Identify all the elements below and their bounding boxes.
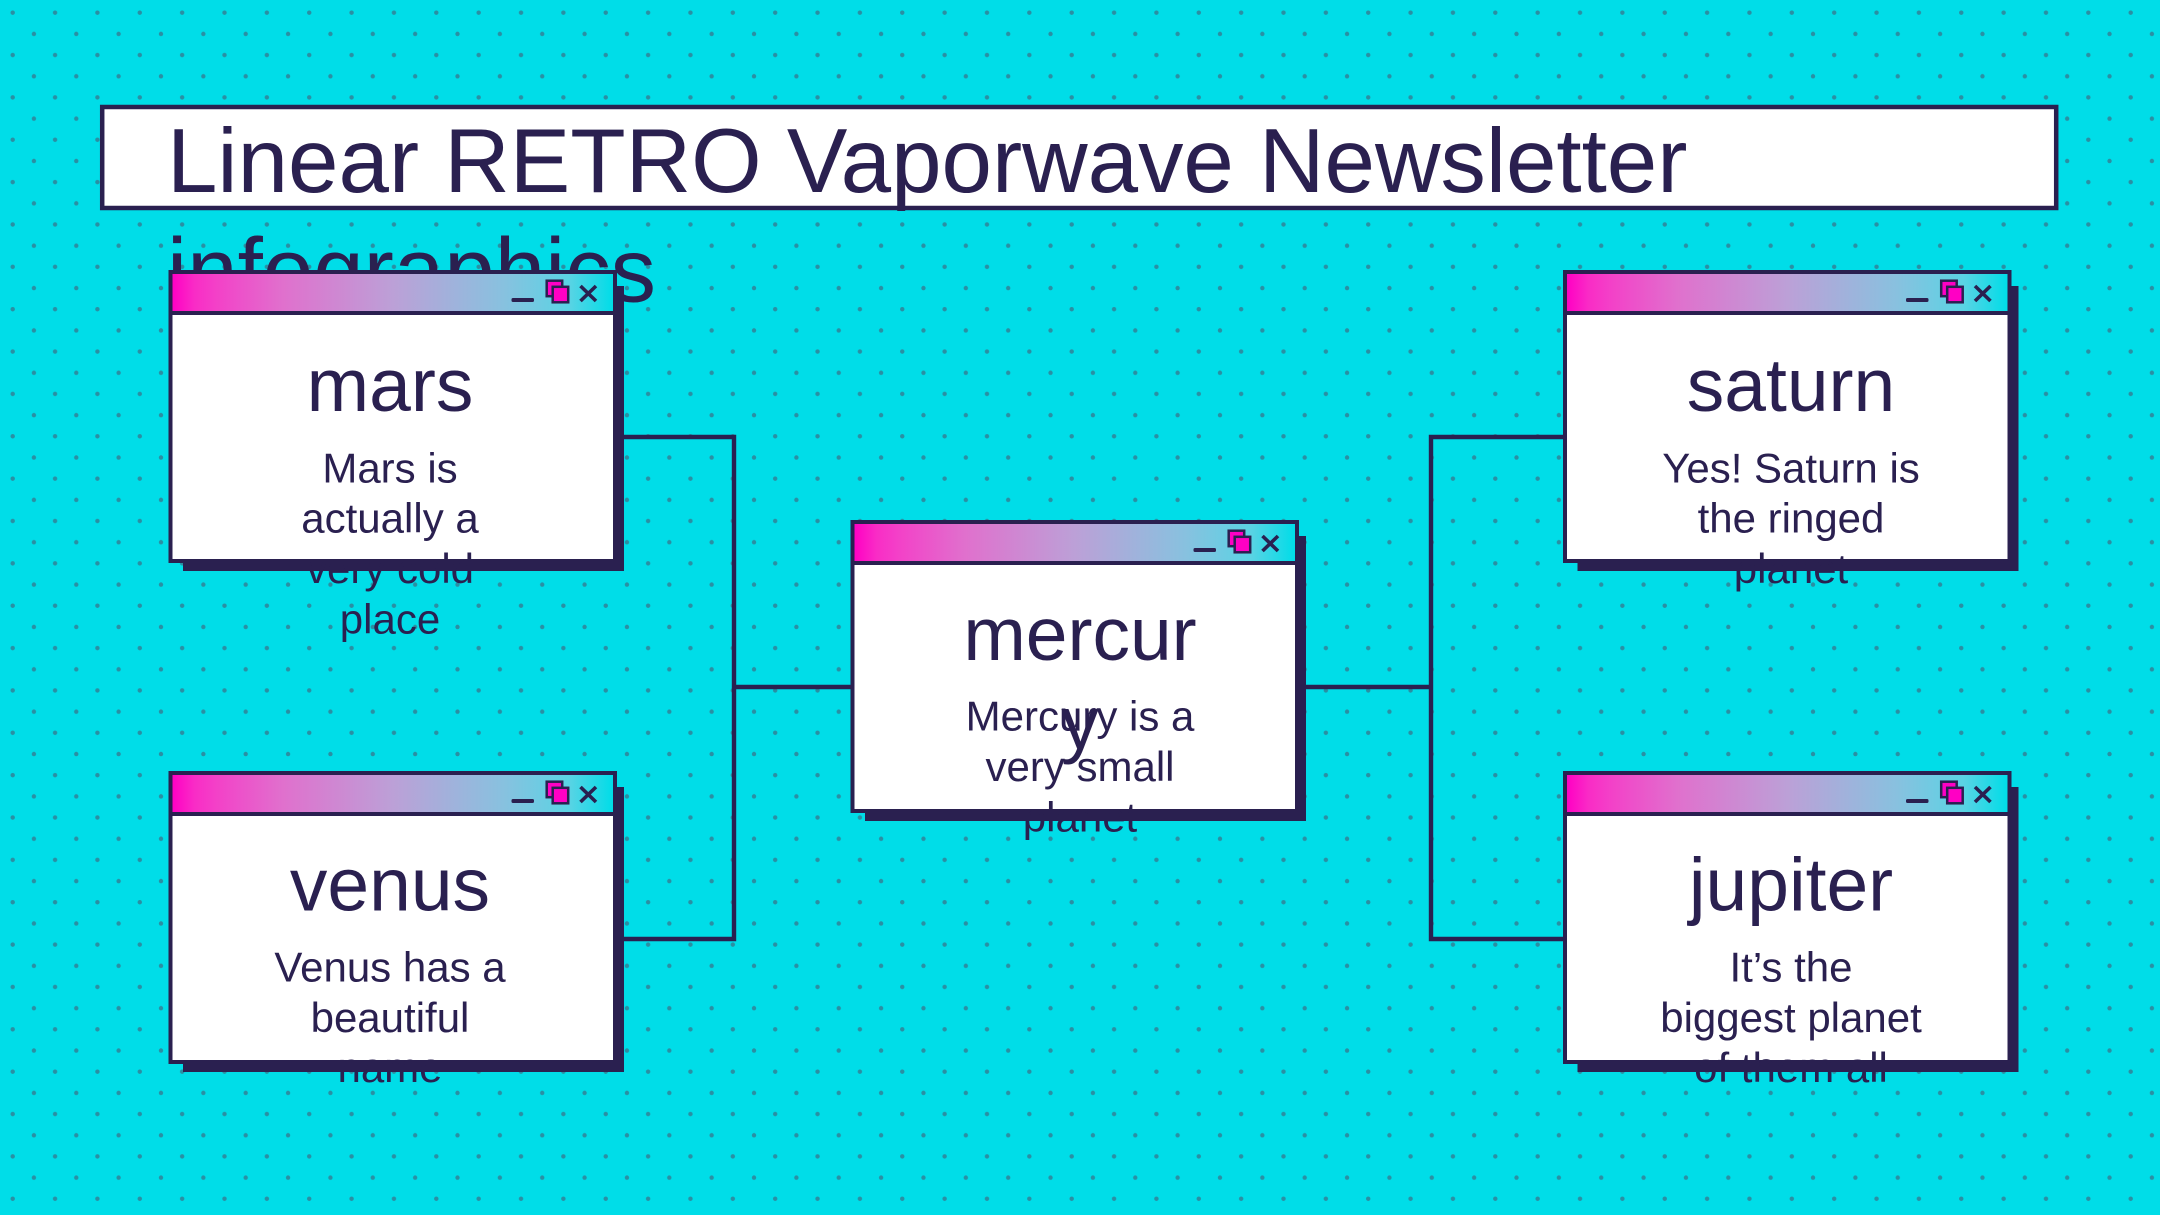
window: jupiter: It’s the	[1730, 944, 1852, 990]
window: mars: mars	[307, 343, 473, 427]
window: venus	[170, 773, 624, 1091]
window: mercury: y	[1061, 681, 1099, 765]
window: jupiter	[1565, 773, 2018, 1091]
window: mercury: mercur	[963, 592, 1197, 676]
window: mars: very cold	[306, 545, 474, 592]
connector lines	[620, 437, 1566, 939]
window: mars: actually a	[301, 495, 479, 542]
title: infographics	[167, 220, 656, 322]
window: mars: Mars is	[322, 444, 458, 491]
window: saturn	[1565, 272, 2018, 592]
window: mars	[170, 272, 624, 642]
window: jupiter: biggest planet	[1660, 994, 1922, 1041]
window: mercury: planet	[1023, 794, 1138, 840]
window: mercury	[852, 522, 1306, 840]
window: saturn: Yes! Saturn is	[1662, 444, 1920, 491]
window: saturn: planet	[1734, 545, 1849, 592]
window: venus: beautiful	[311, 994, 469, 1041]
window: venus: Venus has a	[274, 944, 506, 990]
window: venus: name	[337, 1044, 443, 1091]
window: saturn: saturn	[1687, 343, 1895, 427]
title: Linear RETRO Vaporwave Newsletter	[167, 111, 1687, 212]
window: venus: venus	[290, 842, 490, 926]
window: mars: place	[340, 595, 440, 642]
window: jupiter: jupiter	[1687, 842, 1893, 926]
window: saturn: the ringed	[1698, 495, 1884, 542]
window: jupiter: of them all	[1694, 1044, 1888, 1091]
title	[102, 107, 2056, 322]
window: mercury: Mercury is a	[966, 693, 1195, 740]
window: mercury: very small	[985, 743, 1175, 790]
